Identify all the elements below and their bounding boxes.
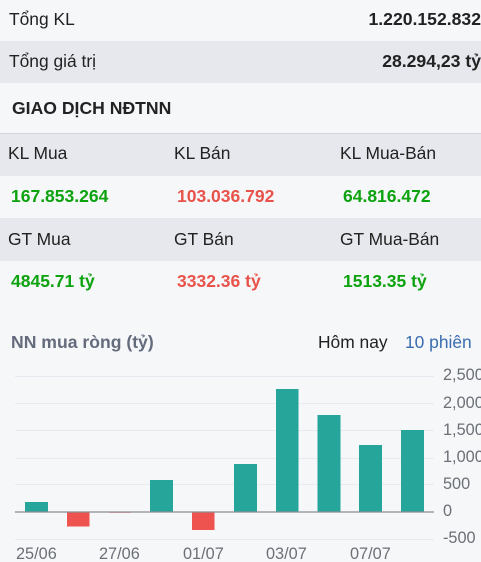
label: sell value: GT Bán xyxy=(174,229,234,249)
x axis labels xyxy=(16,545,391,562)
label: total value: Tổng giá trị xyxy=(9,51,96,71)
header row: volumes xyxy=(0,133,481,176)
tab: 10 sessions: 10 phiên xyxy=(405,332,472,352)
value: sell volume: 103.036.792 xyxy=(177,186,274,206)
label: sell volume: KL Bán xyxy=(174,143,230,163)
summary row: total volume xyxy=(9,9,481,29)
label: total volume: Tổng KL xyxy=(9,9,75,29)
chart title: NN mua ròng (tỷ) xyxy=(11,332,154,352)
value: net volume: 64.816.472 xyxy=(343,186,431,206)
y axis labels: 0 xyxy=(443,502,452,520)
value: sell value: 3332.36 tỷ xyxy=(177,271,261,291)
label: buy volume: KL Mua xyxy=(8,143,67,163)
zero axis xyxy=(15,511,434,513)
heading: foreign trading: GIAO DỊCH NĐTNN xyxy=(12,98,171,118)
tab: today: Hôm nay xyxy=(318,332,388,352)
label: net value: GT Mua-Bán xyxy=(340,229,439,249)
negative bars xyxy=(67,512,214,530)
y axis labels: -500 xyxy=(443,529,476,547)
value: buy volume: 167.853.264 xyxy=(11,186,108,206)
summary row: total value xyxy=(0,41,481,83)
value: total value: 28.294,23 tỷ xyxy=(382,51,481,71)
value: total volume: 1.220.152.832 xyxy=(368,9,481,29)
positive bars xyxy=(25,389,424,512)
label: buy value: GT Mua xyxy=(8,229,70,249)
value: buy value: 4845.71 tỷ xyxy=(11,271,95,291)
y axis labels: 500 xyxy=(443,475,470,493)
header row: values xyxy=(0,218,481,261)
value: net value: 1513.35 tỷ xyxy=(343,271,427,291)
y axis labels xyxy=(443,366,481,547)
label: net volume: KL Mua-Bán xyxy=(340,143,436,163)
